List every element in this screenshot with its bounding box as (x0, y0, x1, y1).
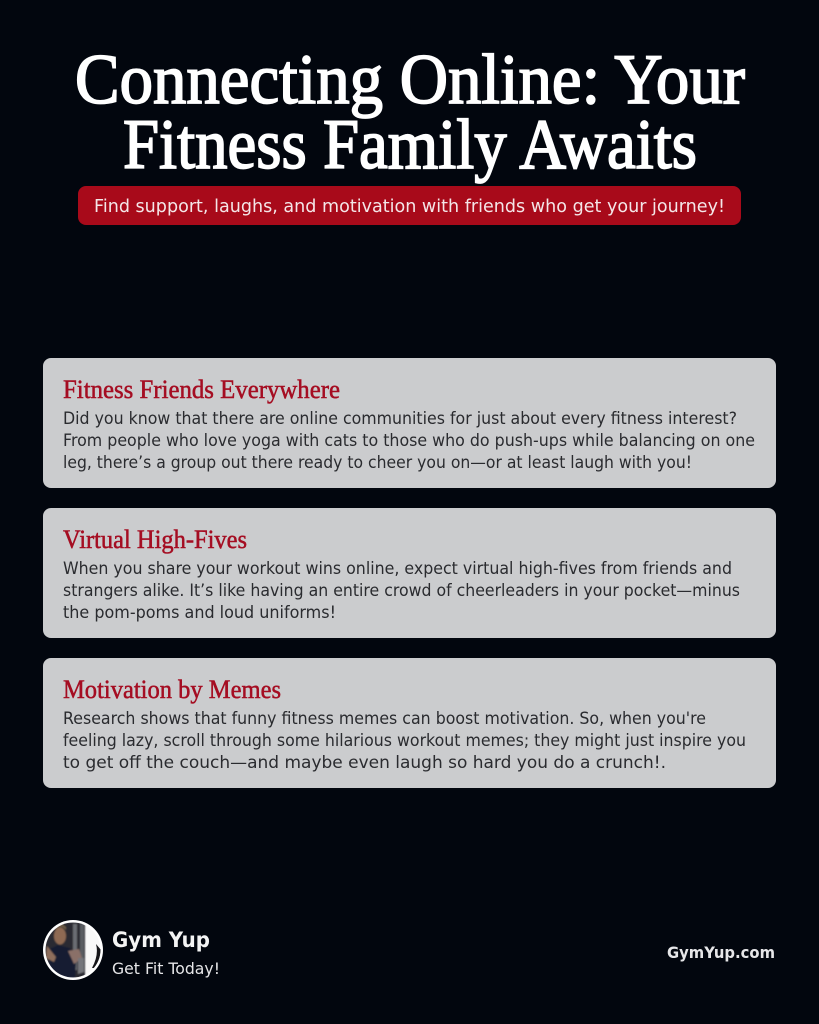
text block: Virtual High-Fives: the pom-poms and loud uniforms! (63, 603, 336, 623)
text block: Fitness Friends Everywhere: From people who love yoga with cats to those who do push-ups while balancing on one (63, 431, 755, 451)
panel: Motivation by Memes (43, 658, 776, 788)
panel: Fitness Friends Everywhere (43, 358, 776, 488)
icon: profile avatar (43, 920, 103, 980)
website: GymYup.com (667, 943, 775, 962)
title (75, 41, 745, 184)
text block: Virtual High-Fives (63, 559, 740, 623)
text block: Motivation by Memes: Research shows that funny fitness memes can boost motivation. So, when you're (63, 709, 706, 729)
text block: Motivation by Memes: feeling lazy, scroll through some hilarious workout memes; they might just inspire you (63, 731, 746, 751)
title: Connecting Online: Your (75, 41, 745, 119)
panel: Virtual High-Fives (43, 508, 776, 638)
heading: Motivation by Memes: Motivation by Memes (63, 675, 281, 704)
heading: Fitness Friends Everywhere: Fitness Friends Everywhere (63, 375, 340, 404)
title: Fitness Family Awaits (123, 106, 697, 184)
text block: Fitness Friends Everywhere: leg, there’s a group out there ready to cheer you on—or at least laugh with you! (63, 453, 692, 473)
text block: Fitness Friends Everywhere (63, 409, 755, 473)
subtitle banner: Find support, laughs, and motivation with friends who get your journey! (94, 197, 725, 217)
text block: Fitness Friends Everywhere: Did you know that there are online communities for just about every fitness interest? (63, 409, 737, 429)
text block: Motivation by Memes (63, 709, 746, 773)
subtitle banner (78, 186, 741, 225)
text block: Virtual High-Fives: When you share your workout wins online, expect virtual high-fives from friends and (63, 559, 732, 579)
tagline: Get Fit Today! (112, 959, 220, 978)
heading: Virtual High-Fives: Virtual High-Fives (63, 525, 247, 554)
text block: Virtual High-Fives: strangers alike. It’s like having an entire crowd of cheerleaders in your pocket—minus (63, 581, 740, 601)
brand name: Gym Yup (112, 928, 210, 953)
text block: Motivation by Memes: to get off the couch—and maybe even laugh so hard you do a crunch!. (63, 753, 666, 773)
